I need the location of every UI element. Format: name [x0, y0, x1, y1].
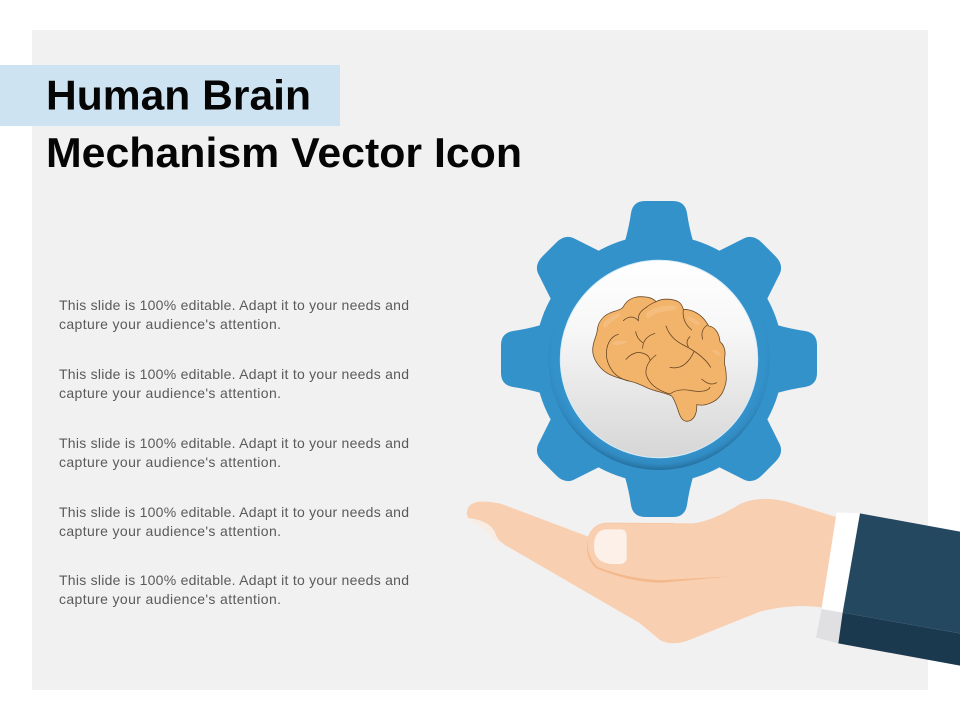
text block 3 — [59, 435, 409, 470]
title — [46, 72, 522, 176]
text block 4: capture your audience's attention. — [59, 523, 281, 539]
text block 1: capture your audience's attention. — [59, 316, 281, 332]
icon: brain — [593, 297, 726, 421]
white disc — [560, 260, 758, 458]
text block 2: capture your audience's attention. — [59, 385, 281, 401]
shirt cuff — [822, 512, 860, 613]
brain highlights — [603, 305, 721, 356]
text block 4 — [59, 504, 409, 539]
text block 1: This slide is 100% editable. Adapt it to your needs and — [59, 297, 409, 313]
text block 2: This slide is 100% editable. Adapt it to your needs and — [59, 366, 409, 382]
icon: gear — [501, 201, 817, 517]
hand — [467, 499, 837, 643]
brain outline — [593, 297, 726, 421]
fingertip glow — [468, 519, 505, 549]
text block 3: capture your audience's attention. — [59, 454, 281, 470]
thumb outline — [589, 523, 673, 537]
thumb crease — [587, 537, 732, 583]
text block 5: This slide is 100% editable. Adapt it to your needs and — [59, 572, 409, 588]
cuff shadow — [816, 609, 843, 643]
title: Human Brain — [46, 72, 311, 118]
icon: hand with sleeve — [467, 499, 960, 666]
text block 3: This slide is 100% editable. Adapt it to your needs and — [59, 435, 409, 451]
text blocks — [59, 297, 409, 607]
sleeve — [843, 513, 960, 633]
title: Mechanism Vector Icon — [46, 129, 522, 176]
text block 5: capture your audience's attention. — [59, 591, 281, 607]
inner ring with shadow — [548, 248, 770, 470]
text block 1 — [59, 297, 409, 332]
gear body and teeth — [501, 201, 817, 517]
thumbnail — [594, 529, 627, 564]
brain folds — [606, 302, 717, 394]
text block 5 — [59, 572, 409, 607]
title highlight band — [0, 65, 340, 126]
sleeve shadow — [838, 613, 960, 666]
text block 2 — [59, 366, 409, 401]
text block 4: This slide is 100% editable. Adapt it to your needs and — [59, 504, 409, 520]
